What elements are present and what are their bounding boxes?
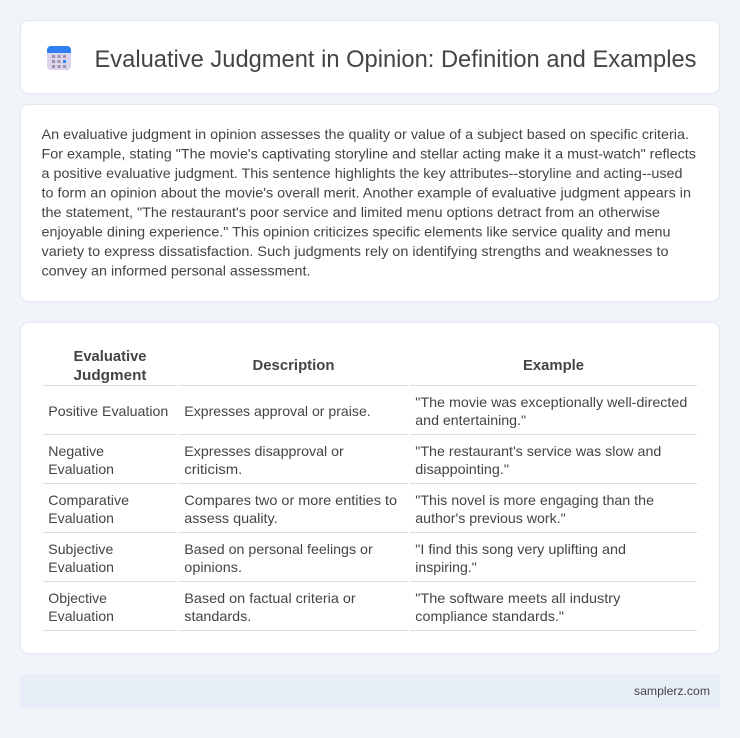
table header: Evaluative: [74, 349, 146, 365]
row: objective evaluation: [48, 590, 620, 624]
title: Evaluative Judgment in Opinion: Definition and Examples: [94, 46, 696, 73]
footer: [20, 674, 720, 708]
row: subjective evaluation: inspiring.": [415, 559, 477, 575]
row: negative evaluation: Negative: [48, 443, 104, 459]
row: negative evaluation: disappointing.": [415, 461, 509, 477]
row: subjective evaluation: Evaluation: [48, 559, 114, 575]
row: subjective evaluation: Based on personal feelings or: [184, 541, 373, 557]
row: negative evaluation: "The restaurant's service was slow and: [415, 443, 661, 459]
text block: introduction paragraph: a positive evaluative judgment. This sentence highlights the key attributes--storyline and acting--used: [42, 165, 682, 181]
row: objective evaluation: standards.: [184, 608, 251, 624]
text block: introduction paragraph: [42, 126, 696, 278]
row: comparative evaluation: Compares two or more entities to: [184, 492, 397, 508]
row: comparative evaluation: assess quality.: [184, 510, 278, 526]
panel: introduction: [20, 104, 720, 302]
text block: introduction paragraph: convey an informed personal assessment.: [42, 262, 310, 278]
text block: introduction paragraph: An evaluative judgment in opinion assesses the quality or value of a subject based on specific criteria.: [42, 126, 689, 142]
row: negative evaluation: Expresses disapproval or: [184, 443, 344, 459]
row: subjective evaluation: "I find this song very uplifting and: [415, 541, 626, 557]
row: positive evaluation: [48, 394, 687, 428]
row: positive evaluation: Expresses approval or praise.: [184, 403, 371, 419]
row: comparative evaluation: [48, 492, 654, 526]
text block: introduction paragraph: the statement, "The restaurant's poor service and limited menu options detract from an otherwise: [42, 204, 660, 220]
row: objective evaluation: Evaluation: [48, 608, 114, 624]
text block: introduction paragraph: variety to express dissatisfaction. Such judgments rely on identifying strengths and weaknesses to: [42, 243, 669, 259]
row: objective evaluation: compliance standards.": [415, 608, 564, 624]
row: positive evaluation: and entertaining.": [415, 412, 526, 428]
panel: table: [20, 322, 720, 654]
row: objective evaluation: "The software meets all industry: [415, 590, 620, 606]
row: comparative evaluation: Evaluation: [48, 510, 114, 526]
row: comparative evaluation: Comparative: [48, 492, 129, 508]
row: subjective evaluation: [48, 541, 626, 575]
text block: introduction paragraph: enjoyable dining experience." This opinion criticizes specific elements like service quality and menu: [42, 224, 670, 240]
row: subjective evaluation: Subjective: [48, 541, 114, 557]
row: negative evaluation: [48, 443, 661, 477]
row: positive evaluation: Positive Evaluation: [48, 403, 168, 419]
row: comparative evaluation: author's previous work.": [415, 510, 566, 526]
text block: introduction paragraph: to form an opinion about the movie's overall merit. Another example of evaluative judgment appears in: [42, 184, 691, 200]
table header: Judgment: [74, 368, 147, 384]
icon: calendar: [47, 46, 71, 70]
panel: header: [20, 20, 720, 94]
row: objective evaluation: Objective: [48, 590, 107, 606]
table header: Description: [252, 358, 334, 374]
table header: [74, 349, 584, 384]
row: negative evaluation: criticism.: [184, 461, 242, 477]
footer source text: samplerz.com: [634, 684, 710, 698]
row: objective evaluation: Based on factual criteria or: [184, 590, 356, 606]
text block: introduction paragraph: For example, stating "The movie's captivating storyline and stellar acting make it a must-watch" reflects: [42, 146, 696, 162]
row: subjective evaluation: opinions.: [184, 559, 242, 575]
row: comparative evaluation: "This novel is more engaging than the: [415, 492, 654, 508]
row: negative evaluation: Evaluation: [48, 461, 114, 477]
row: positive evaluation: "The movie was exceptionally well-directed: [415, 394, 687, 410]
table header: Example: [523, 358, 584, 374]
